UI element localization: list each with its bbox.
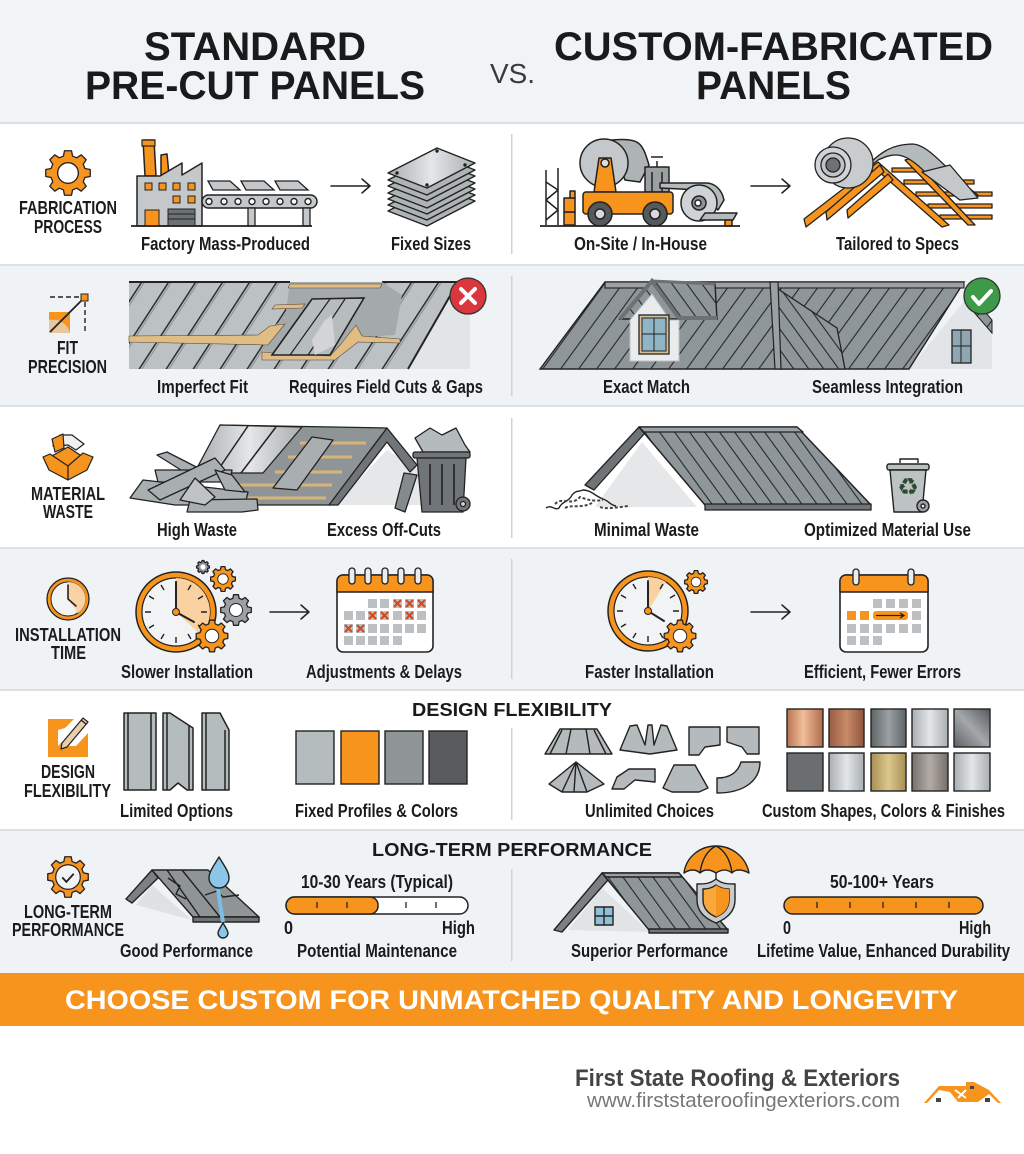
gauge: 10-30 years: 10-30 Years (Typical): [301, 872, 453, 892]
illustration: imperfect roof: [129, 282, 470, 369]
row label: long-term performance: PERFORMANCE: [12, 920, 124, 940]
website: www.firststateroofingexteriors.com: [586, 1090, 900, 1112]
illustration: custom panel shapes: [545, 725, 760, 793]
header band: [0, 0, 1024, 124]
arrow: [751, 605, 790, 619]
label: Minimal Waste: [594, 520, 699, 540]
label: Unlimited Choices: [585, 801, 714, 821]
label: Slower Installation: [121, 662, 253, 682]
row label: fabrication process: PROCESS: [34, 217, 102, 237]
label: Optimized Material Use: [804, 520, 971, 540]
label: Faster Installation: [585, 662, 714, 682]
row label: long-term performance: [12, 902, 124, 940]
illustration: efficient roof: [546, 427, 871, 510]
row label: material waste: WASTE: [43, 502, 93, 522]
icon: gear with check: [48, 857, 88, 897]
row label: material waste: MATERIAL: [31, 484, 105, 504]
icon: recycle bin: ♻: [897, 473, 919, 501]
row label: installation time: TIME: [51, 643, 86, 663]
label: Adjustments & Delays: [306, 662, 462, 682]
illustration: on-site coil machine: [540, 139, 740, 226]
heading: custom panels: [554, 25, 993, 108]
row label: design flexibility: DESIGN: [41, 762, 95, 782]
icon: pencil on square: [48, 718, 88, 757]
illustration: wasteful roof and debris: [130, 425, 470, 512]
icon: green check badge: [964, 278, 1000, 314]
label: Seamless Integration: [812, 377, 963, 397]
row label: fabrication process: FABRICATION: [19, 198, 117, 218]
label: Imperfect Fit: [157, 377, 248, 397]
label: High Waste: [157, 520, 237, 540]
icon: calendar with delays: [337, 568, 433, 652]
gauge: 10-30 years: High: [442, 918, 475, 938]
row label: fit precision: FIT: [57, 338, 78, 358]
row: design flexibility: [0, 691, 1024, 831]
gauge: 50-100+ years: 0: [783, 918, 791, 938]
icon: open box: [43, 434, 93, 480]
label: Exact Match: [603, 377, 690, 397]
label: Superior Performance: [571, 941, 728, 961]
label: Limited Options: [120, 801, 233, 821]
banner: CHOOSE CUSTOM FOR UNMATCHED QUALITY AND LONGEVITY: [65, 985, 958, 1015]
illustration: coil over rafters: [804, 138, 992, 227]
footer: [575, 1065, 1001, 1112]
section heading: LONG-TERM PERFORMANCE: [372, 840, 652, 860]
icon: fast clock with gears: [608, 571, 707, 652]
heading: standard panels: PRE-CUT PANELS: [85, 64, 425, 108]
vs label: VS.: [490, 58, 535, 89]
row label: material waste: [31, 484, 105, 522]
banner: [0, 973, 1024, 1026]
illustration: limited panel profiles: [124, 713, 229, 790]
illustration: stacked sheets: [388, 148, 475, 226]
label: Good Performance: [120, 941, 253, 961]
gauge: 50-100+ years: High: [959, 918, 991, 938]
row label: design flexibility: [24, 762, 111, 801]
company name: First State Roofing & Exteriors: [575, 1065, 900, 1092]
row: installation time: [0, 549, 1024, 691]
heading: custom panels: CUSTOM-FABRICATED: [554, 25, 993, 69]
label: Factory Mass-Produced: [141, 234, 310, 254]
row label: fabrication process: [19, 198, 117, 237]
illustration: leaking roof: [126, 857, 259, 938]
label: Requires Field Cuts & Gaps: [289, 377, 483, 397]
icon: efficient calendar: [840, 569, 928, 652]
row label: fit precision: [28, 338, 107, 377]
row: long-term performance: [0, 831, 1024, 973]
gauge: 10-30 years: 0: [284, 918, 293, 938]
row label: fit precision: PRECISION: [28, 357, 107, 377]
row label: installation time: INSTALLATION: [15, 625, 121, 645]
label: Fixed Profiles & Colors: [295, 801, 458, 821]
gauge: 50-100+ years: [783, 872, 991, 938]
label: Potential Maintenance: [297, 941, 457, 961]
label: Tailored to Specs: [836, 234, 959, 254]
label: Efficient, Fewer Errors: [804, 662, 961, 682]
icon: recycle bin: [887, 459, 929, 512]
icon: gear: [46, 151, 90, 195]
gauge: 10-30 years: [284, 872, 475, 938]
heading: standard panels: [85, 25, 425, 108]
row label: long-term performance: LONG-TERM: [24, 902, 112, 922]
illustration: exact match roof: [540, 281, 992, 369]
illustration: superior roof with shield and umbrella: [554, 846, 749, 933]
row: material waste: [0, 407, 1024, 549]
arrow: [331, 179, 370, 193]
illustration: factory and conveyor: [131, 140, 317, 226]
row label: installation time: [15, 625, 121, 663]
icon: logo: [924, 1082, 1001, 1103]
heading: custom panels: PANELS: [696, 64, 851, 108]
arrow: [751, 179, 790, 193]
arrow: [270, 605, 309, 619]
gauge: 50-100+ years: 50-100+ Years: [830, 872, 934, 892]
icon: slow clock with gears: [136, 561, 251, 652]
color swatches: custom finishes: [787, 709, 990, 791]
row: fit precision: [0, 266, 1024, 407]
label: On-Site / In-House: [574, 234, 707, 254]
color swatches: fixed: [296, 731, 467, 784]
label: Excess Off-Cuts: [327, 520, 441, 540]
icon: red x badge: [450, 278, 486, 314]
icon: small clock: [47, 578, 89, 620]
row label: design flexibility: FLEXIBILITY: [24, 781, 111, 801]
label: Fixed Sizes: [391, 234, 471, 254]
row: fabrication process: [0, 124, 1024, 266]
icon: fit precision: [49, 294, 88, 333]
heading: standard panels: STANDARD: [144, 25, 366, 69]
section heading: DESIGN FLEXIBILITY: [412, 700, 612, 720]
